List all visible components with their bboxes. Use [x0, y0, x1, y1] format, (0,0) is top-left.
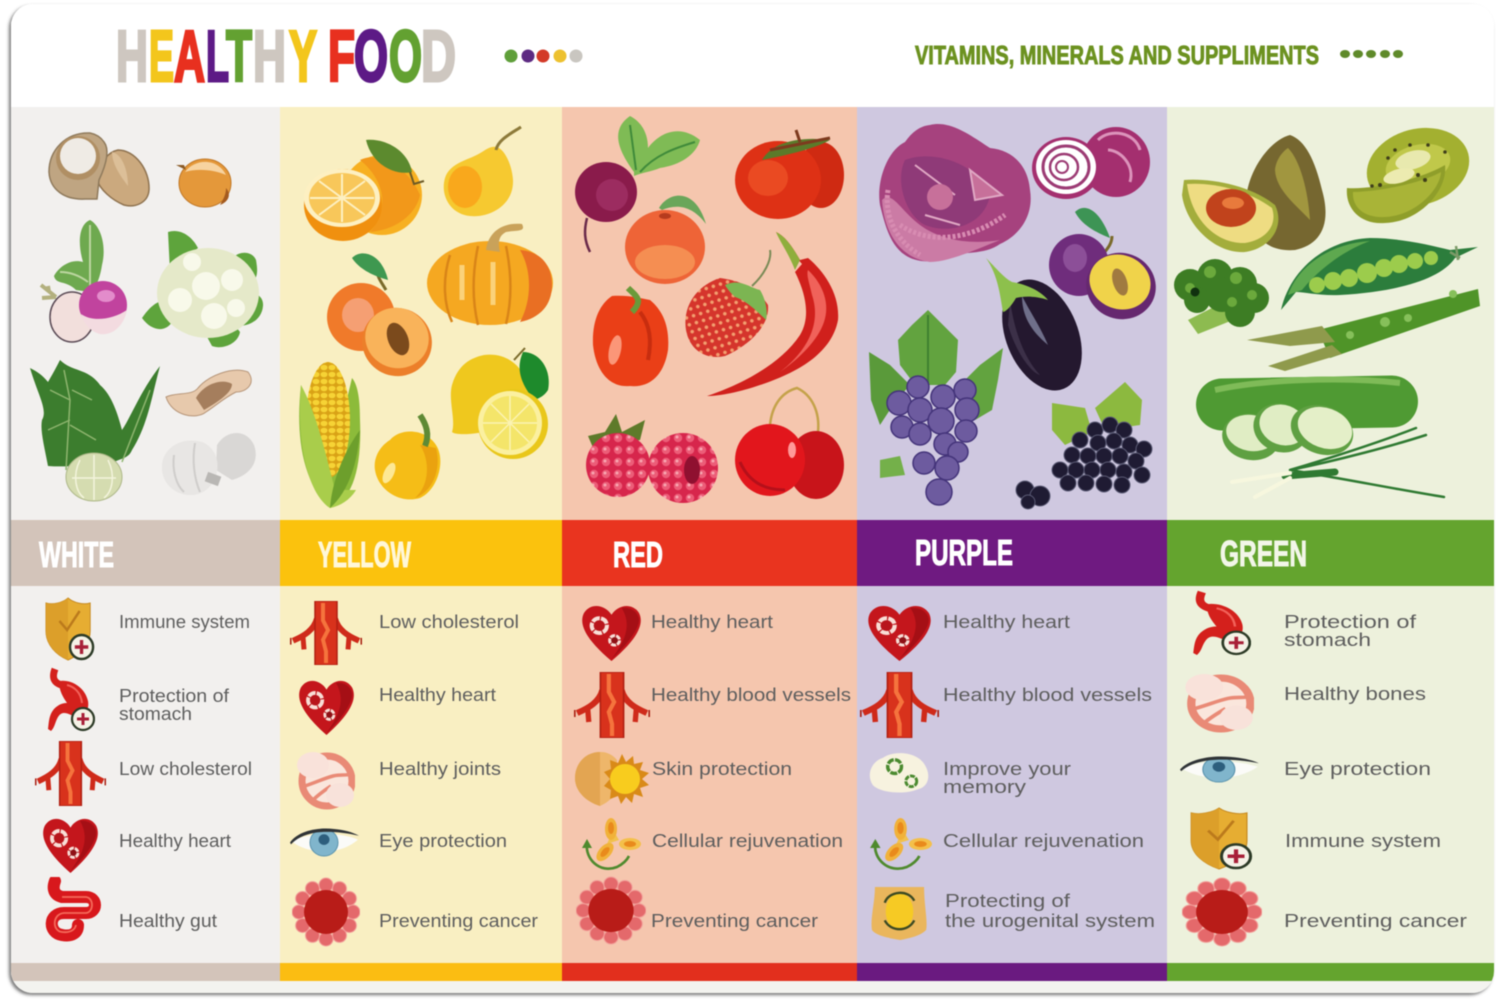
icon: cancer — [292, 878, 360, 946]
label: improve your memory — [943, 758, 1071, 797]
icon: urogenital — [872, 887, 927, 940]
label: cellular rejuvenation: Cellular rejuvenation — [652, 830, 843, 851]
panel: yellow foods — [280, 107, 562, 981]
label: immune system: Immune system — [119, 611, 250, 632]
cucumber — [1196, 375, 1418, 465]
icon: cancer — [1182, 878, 1262, 946]
yellow pepper — [375, 415, 440, 499]
header bar — [118, 28, 1404, 84]
icon: eye — [290, 828, 359, 856]
raspberries — [586, 414, 718, 503]
label: eye protection: Eye protection — [1284, 758, 1431, 779]
label: skin protection: Skin protection — [652, 758, 792, 779]
title: Healthy Food: A — [174, 17, 205, 97]
icon: heart — [43, 819, 98, 873]
band: white: WHITE — [39, 534, 114, 575]
icon: sun and skin — [575, 752, 649, 806]
label: improve your memory: memory — [943, 776, 1027, 797]
label: improve your memory: Improve your — [943, 758, 1071, 779]
label: protecting of the urogenital system — [945, 890, 1155, 931]
icon: vessel — [290, 601, 362, 665]
tomato — [735, 130, 844, 219]
red cabbage — [879, 124, 1031, 262]
label: healthy blood vessels: Healthy blood vessels — [651, 684, 851, 705]
label: preventing cancer: Preventing cancer — [651, 910, 818, 931]
turnip — [41, 220, 127, 342]
label: protection of stomach: stomach — [1284, 629, 1371, 650]
icon: heart — [868, 606, 931, 661]
icon: stomach — [1193, 592, 1250, 655]
lemon — [451, 348, 549, 459]
label: protecting of the urogenital system: Protecting of — [945, 890, 1071, 911]
label: healthy heart: Healthy heart — [943, 611, 1070, 632]
red onion — [1032, 127, 1150, 199]
icon: gut — [52, 881, 95, 936]
label: protection of stomach: stomach — [119, 703, 192, 724]
eggplant — [986, 258, 1097, 402]
title: Healthy Food: T — [226, 17, 252, 97]
icon: cell rejuvenation — [870, 818, 932, 869]
band: white — [11, 520, 280, 586]
icon: stomach — [48, 669, 94, 731]
beet — [575, 116, 700, 252]
kiwi — [1347, 117, 1478, 223]
bottom margin strip — [11, 981, 1494, 993]
icon: vessel — [860, 672, 939, 738]
label: low cholesterol: Low cholesterol — [119, 758, 252, 779]
pumpkin — [427, 224, 553, 325]
label: protection of stomach — [1284, 611, 1417, 650]
icon: brain — [870, 753, 928, 793]
label: cellular rejuvenation: Cellular rejuvenation — [943, 830, 1144, 851]
band: purple: PURPLE — [915, 532, 1013, 573]
icon: heart — [299, 681, 354, 735]
beans — [166, 370, 251, 416]
band: green — [1167, 520, 1494, 586]
title: Healthy Food — [118, 28, 456, 84]
bottom stripe: purple — [857, 963, 1167, 981]
title dots — [504, 50, 582, 62]
label: healthy heart: Healthy heart — [379, 684, 496, 705]
band: green: GREEN — [1220, 533, 1307, 574]
title: Healthy Food: Y — [289, 17, 317, 97]
strawberry — [685, 250, 770, 357]
subtitle: VITAMINS, MINERALS AND SUPPLIMENTS — [915, 40, 1319, 70]
bottom stripe: white — [11, 963, 280, 981]
label: healthy bones: Healthy bones — [1284, 683, 1426, 704]
spring onions — [1232, 428, 1444, 497]
title: Healthy Food: O — [389, 17, 422, 97]
icon: heart — [582, 606, 641, 661]
bottom stripe: yellow — [280, 963, 562, 981]
mushrooms — [49, 133, 149, 206]
label: protection of stomach: Protection of — [1284, 611, 1417, 632]
panel: green foods — [1167, 107, 1494, 981]
title: Healthy Food: F — [328, 17, 355, 97]
label: healthy gut: Healthy gut — [119, 910, 217, 931]
label: protecting of the urogenital system: the urogenital system — [945, 910, 1155, 931]
label: immune system: Immune system — [1285, 830, 1441, 851]
asparagus — [1247, 289, 1480, 371]
chili pepper — [707, 232, 838, 396]
label: healthy joints: Healthy joints — [379, 758, 501, 779]
icon: immune shield — [1191, 808, 1251, 869]
icon: cancer — [576, 877, 646, 944]
bottom stripe: red — [562, 963, 857, 981]
red pepper — [593, 288, 668, 386]
title: Healthy Food: E — [149, 17, 174, 97]
label: protection of stomach: Protection of — [119, 685, 230, 706]
panel: white foods — [11, 107, 280, 981]
onion — [176, 159, 231, 207]
icon: eye — [1180, 756, 1259, 782]
title: Healthy Food: O — [354, 17, 388, 97]
title: Healthy Food: H — [116, 17, 148, 97]
garlic — [162, 433, 256, 495]
panel: purple foods — [857, 107, 1167, 981]
pea pod — [1281, 238, 1478, 310]
label: healthy heart: Healthy heart — [119, 830, 231, 851]
subtitle dots — [1340, 50, 1403, 58]
icon: cell rejuvenation — [582, 818, 641, 869]
band: red — [562, 520, 857, 586]
label: eye protection: Eye protection — [379, 830, 507, 851]
band: yellow: YELLOW — [318, 534, 411, 575]
label: healthy blood vessels: Healthy blood vessels — [943, 684, 1152, 705]
icon: vessel — [574, 672, 650, 738]
icon: vessel — [35, 741, 106, 806]
label: preventing cancer: Preventing cancer — [379, 910, 538, 931]
title: Healthy Food: L — [206, 17, 229, 97]
icon: joints — [297, 752, 354, 807]
orange apple — [625, 196, 706, 284]
icon: joints — [1185, 674, 1253, 730]
band: red: RED — [613, 534, 663, 575]
cauliflower — [142, 231, 263, 347]
icon: immune shield — [46, 598, 93, 660]
band: purple — [857, 520, 1167, 586]
panel: red foods — [562, 107, 857, 981]
label: low cholesterol: Low cholesterol — [379, 611, 519, 632]
title: Healthy Food: H — [253, 17, 286, 97]
band: yellow — [280, 520, 562, 586]
pear — [444, 127, 521, 216]
kale — [30, 360, 160, 501]
label: preventing cancer: Preventing cancer — [1284, 910, 1467, 931]
blackberries — [1016, 382, 1152, 509]
label: protection of stomach — [119, 688, 230, 721]
grapes — [869, 310, 1003, 505]
title: Healthy Food: D — [421, 17, 456, 97]
label: healthy heart: Healthy heart — [651, 611, 773, 632]
broccoli — [1174, 259, 1269, 334]
bottom stripe: green — [1167, 963, 1494, 981]
avocado — [1182, 135, 1326, 252]
orange — [304, 140, 424, 241]
corn — [299, 362, 360, 508]
apricot — [326, 252, 433, 377]
plum — [1049, 208, 1165, 329]
cherries — [735, 388, 844, 499]
